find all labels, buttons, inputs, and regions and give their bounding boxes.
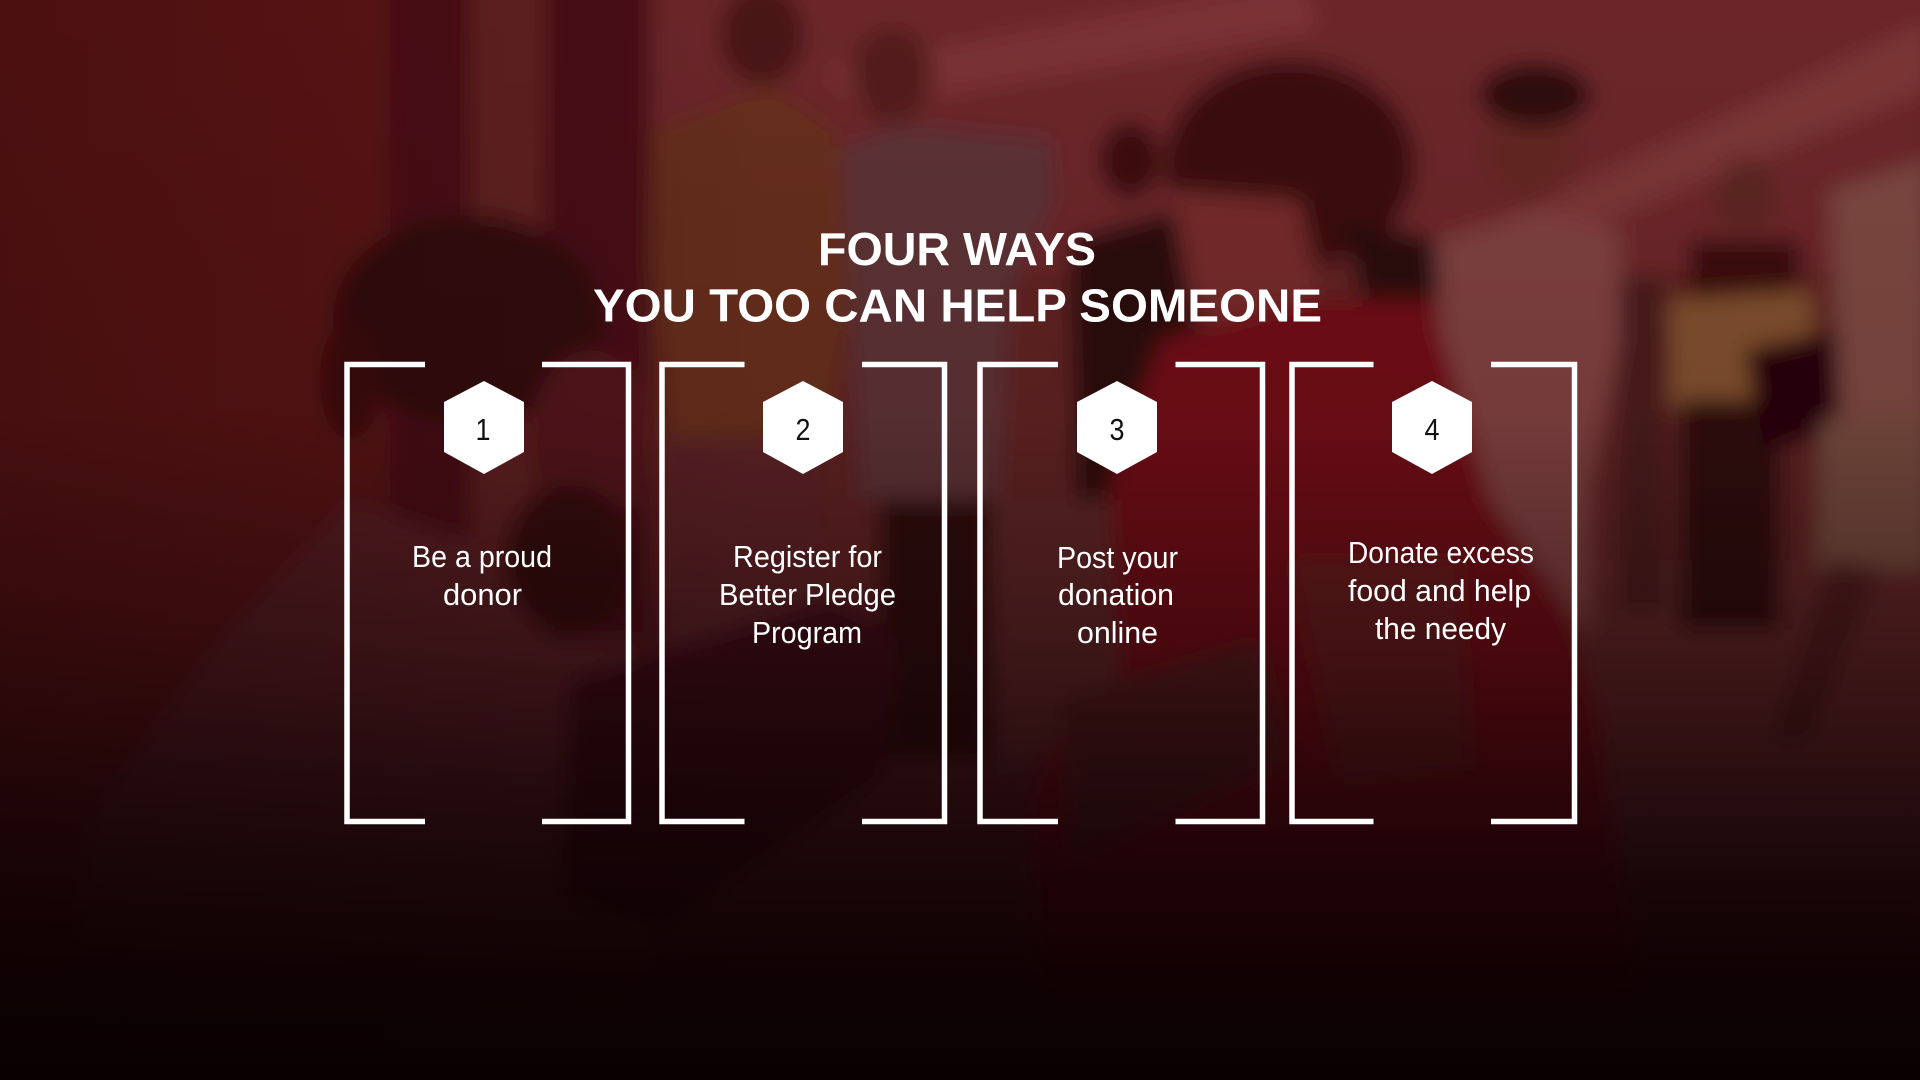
panel: way 3	[980, 364, 1262, 822]
text: be a proud donor	[412, 539, 552, 612]
far right people	[1715, 159, 1775, 231]
icon: hexagon number 4	[1392, 381, 1472, 474]
panel: way 1	[347, 364, 628, 822]
icon: hexagon number 3	[1077, 381, 1157, 474]
bracket frame 3	[980, 364, 1262, 822]
text: donate excess food and help the needy: Donate excess	[1348, 535, 1534, 570]
icon: hexagon number 1: 1	[476, 412, 490, 447]
text: donate excess food and help the needy: food and help	[1348, 573, 1531, 608]
icon: hexagon number 4: 4	[1424, 412, 1440, 447]
text: register for better pledge program: Better Pledge	[719, 577, 896, 612]
title	[593, 223, 1322, 332]
boy at right	[1484, 95, 1576, 205]
text: register for better pledge program: Program	[752, 615, 862, 650]
title: YOU TOO CAN HELP SOMEONE	[593, 280, 1322, 332]
text: post your donation online	[1057, 540, 1178, 650]
panel: way 2	[662, 364, 944, 822]
text: donate excess food and help the needy	[1348, 535, 1534, 646]
man with dark hair and beard	[333, 215, 603, 425]
icon: hexagon number 3: 3	[1110, 412, 1124, 447]
text: register for better pledge program	[719, 539, 896, 650]
bracket frame 2	[662, 364, 944, 822]
text: be a proud donor: Be a proud	[412, 539, 552, 574]
panel: way 4	[1292, 364, 1574, 822]
text: be a proud donor: donor	[443, 577, 522, 612]
bracket frame 4	[1292, 364, 1574, 822]
icon: hexagon number 2	[763, 381, 843, 474]
text: post your donation online: Post your	[1057, 540, 1178, 575]
standing boys	[720, 0, 804, 85]
title: FOUR WAYS	[818, 223, 1096, 275]
text: register for better pledge program: Register for	[733, 539, 882, 574]
icon: hexagon number 2: 2	[796, 412, 810, 447]
girl with red dress	[1165, 60, 1415, 270]
bracket frame 1	[347, 364, 628, 822]
text: donate excess food and help the needy: the needy	[1375, 611, 1506, 646]
icon: hexagon number 1	[444, 381, 524, 474]
text: post your donation online: online	[1077, 615, 1158, 650]
text: post your donation online: donation	[1058, 577, 1174, 612]
